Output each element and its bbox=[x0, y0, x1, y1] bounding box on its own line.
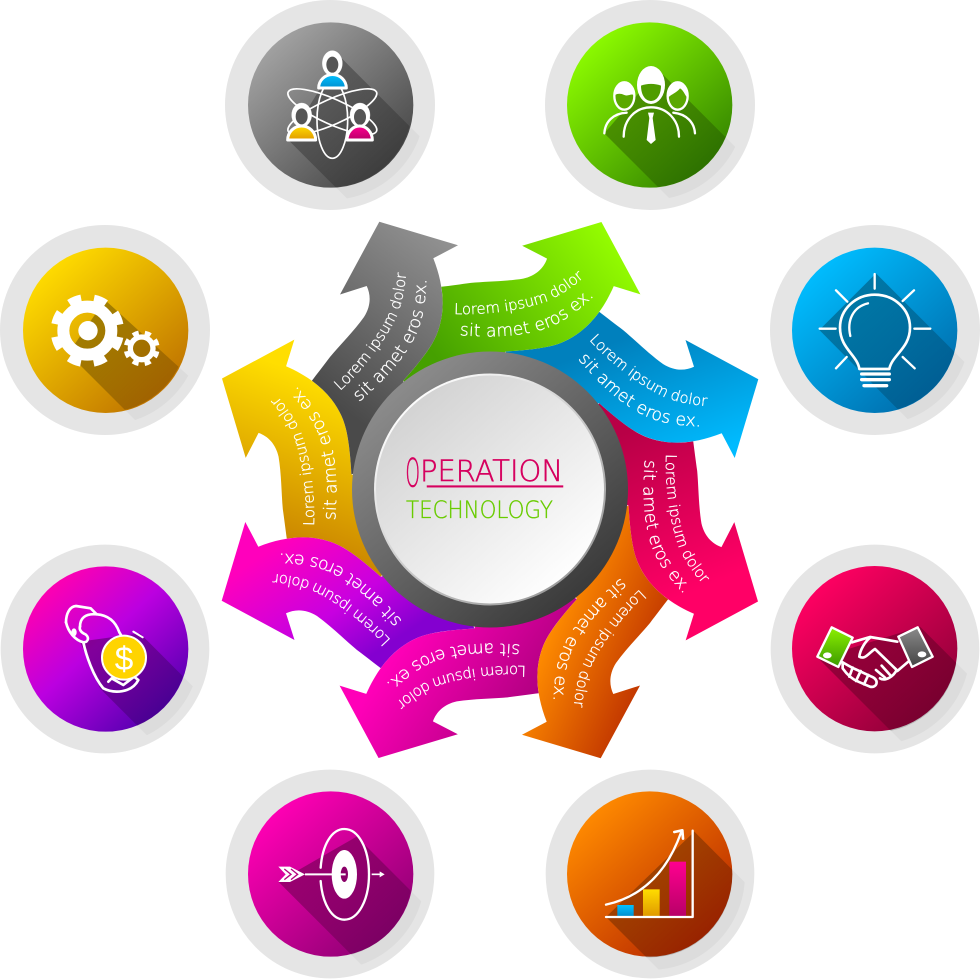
icon circle: target bbox=[226, 770, 445, 978]
arrow: orange: sit amet eros ex. bbox=[553, 578, 626, 699]
icon circle: gears bbox=[0, 225, 213, 445]
arrow: green: Lorem ipsum dolor bbox=[456, 270, 582, 314]
arrow: crimson: sit amet eros ex. bbox=[643, 460, 687, 593]
arrow: yellow bbox=[222, 340, 382, 577]
icon circle: growth chart bbox=[546, 770, 772, 980]
arrow: green bbox=[403, 222, 640, 382]
center plate bbox=[374, 374, 606, 606]
arrow: purple bbox=[222, 522, 474, 668]
arrow: magenta: sit amet eros ex. bbox=[387, 643, 520, 687]
arrow: blue: Lorem ipsum dolor bbox=[590, 334, 708, 406]
arrow: green: sit amet eros ex. bbox=[460, 293, 593, 337]
icon circle: team bbox=[545, 0, 762, 217]
title: operation: O bbox=[406, 452, 420, 497]
arrow: gray: sit amet eros ex. bbox=[354, 281, 427, 402]
title: technology: TECHNOLOGY bbox=[406, 496, 553, 524]
arrow: magenta bbox=[340, 598, 577, 758]
arrow: blue bbox=[506, 312, 758, 458]
arrow: magenta: Lorem ipsum dolor bbox=[398, 666, 524, 710]
arrow: gray bbox=[312, 222, 458, 474]
arrow: gray: Lorem ipsum dolor bbox=[334, 272, 406, 390]
arrow: yellow: sit amet eros ex. bbox=[293, 387, 337, 520]
arrow: yellow: Lorem ipsum dolor bbox=[270, 398, 314, 524]
arrow: blue: sit amet eros ex. bbox=[578, 354, 699, 427]
arrow: purple: sit amet eros ex. bbox=[281, 553, 402, 626]
icon circle: light bulb bbox=[770, 225, 980, 438]
icon circle: people network bbox=[225, 0, 445, 222]
title: operation: PERATION bbox=[420, 454, 563, 488]
icon circle: coin in hand bbox=[1, 545, 213, 753]
arrow: orange bbox=[522, 506, 668, 758]
arrow: orange: Lorem ipsum dolor bbox=[574, 590, 646, 708]
arrow: crimson: Lorem ipsum dolor bbox=[666, 456, 710, 582]
icon circle: coin in hand: $ bbox=[115, 641, 133, 678]
title: operation bbox=[406, 452, 563, 497]
arrow: purple: Lorem ipsum dolor bbox=[272, 574, 390, 646]
center ring bbox=[352, 352, 628, 628]
arrow: crimson bbox=[598, 403, 758, 640]
icon circle: handshake bbox=[771, 545, 980, 760]
